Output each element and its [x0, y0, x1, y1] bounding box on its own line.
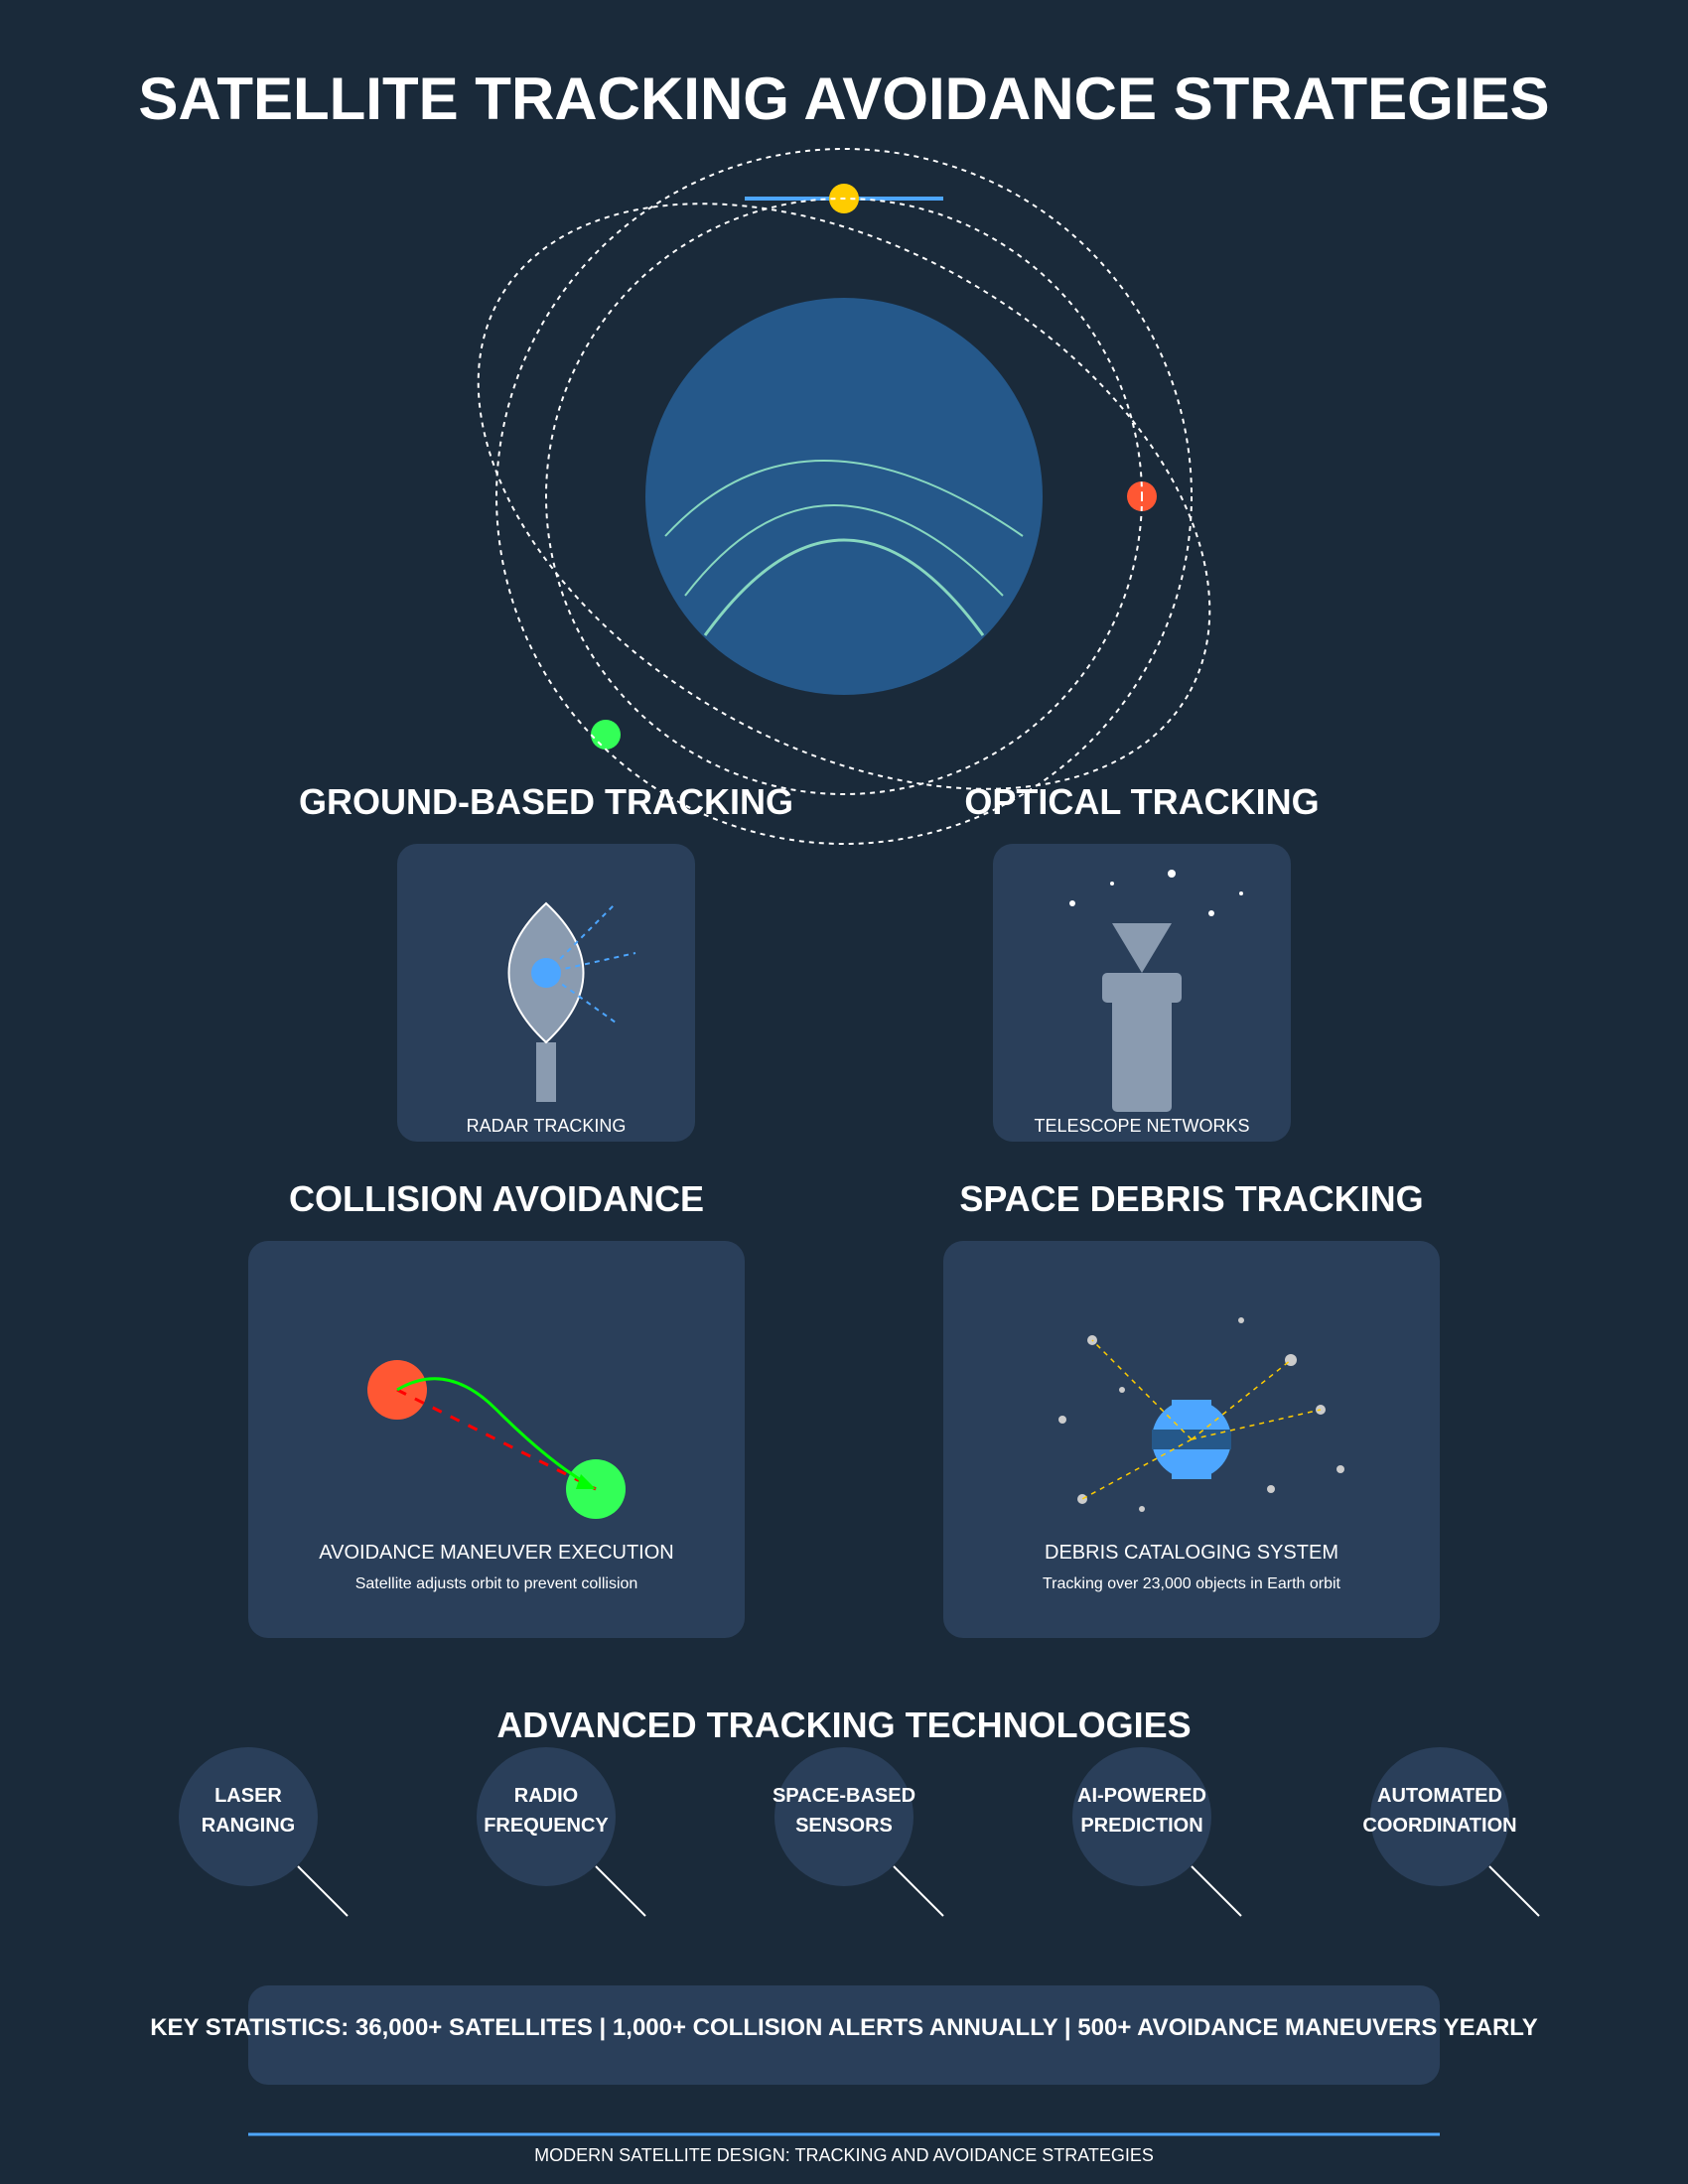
heading: collision avoidance: COLLISION AVOIDANCE	[289, 1178, 704, 1219]
heading: space debris tracking: SPACE DEBRIS TRACKING	[959, 1178, 1424, 1219]
technology: space-based sensors: SPACE-BASED	[773, 1785, 915, 1807]
earth	[645, 298, 1043, 695]
technology: space-based sensors: SENSORS	[795, 1815, 893, 1837]
icon: debris particles	[1058, 1317, 1344, 1512]
satellite: red	[1127, 481, 1157, 511]
icon: green satellite	[566, 1459, 626, 1519]
technology: radio frequency: FREQUENCY	[484, 1815, 609, 1837]
technology: laser ranging: RANGING	[202, 1815, 295, 1837]
icon: red satellite	[367, 1360, 427, 1420]
label: debris cataloging system: DEBRIS CATALOGING SYSTEM	[1045, 1542, 1338, 1564]
title: SATELLITE TRACKING AVOIDANCE STRATEGIES	[138, 66, 1550, 132]
caption: avoidance: Satellite adjusts orbit to prevent collision	[355, 1575, 637, 1592]
heading: optical tracking: OPTICAL TRACKING	[964, 781, 1320, 822]
panel: collision avoidance	[248, 1241, 745, 1638]
panel: telescope networks	[993, 844, 1291, 1142]
icon: tracked satellite	[1152, 1400, 1231, 1479]
icon: radar core	[531, 958, 561, 988]
heading: advanced tracking technologies: ADVANCED TRACKING TECHNOLOGIES	[496, 1705, 1192, 1745]
panel: key statistics	[150, 1985, 1538, 2085]
tracking lines	[1082, 1340, 1321, 1499]
technology: automated coordination: COORDINATION	[1362, 1815, 1517, 1837]
technology: automated coordination	[1362, 1747, 1539, 1916]
technology: radio frequency: RADIO	[514, 1785, 578, 1807]
collision course line	[397, 1390, 596, 1489]
label: radar tracking: RADAR TRACKING	[467, 1116, 626, 1136]
panel: key statistics: KEY STATISTICS: 36,000+ SATELLITES | 1,000+ COLLISION ALERTS ANNUALLY | 500+ AVOIDANCE MANEUVERS YEARLY	[150, 2014, 1538, 2041]
icon: radar dish	[508, 903, 584, 1042]
satellite: yellow with solar panels	[745, 184, 943, 213]
label: avoidance maneuver execution: AVOIDANCE MANEUVER EXECUTION	[319, 1542, 674, 1564]
technology: radio frequency	[477, 1747, 645, 1916]
orbit paths	[376, 82, 1312, 910]
label: telescope networks: TELESCOPE NETWORKS	[1034, 1116, 1250, 1136]
icon: radar beams	[546, 903, 635, 1023]
icon: radar pole	[536, 1042, 556, 1102]
arrow: avoidance path	[397, 1379, 596, 1489]
technology: laser ranging	[179, 1747, 348, 1916]
technology: ai-powered prediction: AI-POWERED	[1077, 1785, 1206, 1807]
panel: radar tracking	[397, 844, 695, 1142]
technology: ai-powered prediction: PREDICTION	[1080, 1815, 1203, 1837]
technology: space-based sensors	[773, 1747, 943, 1916]
orbit diagram	[376, 82, 1312, 910]
footer: MODERN SATELLITE DESIGN: TRACKING AND AVOIDANCE STRATEGIES	[534, 2145, 1154, 2165]
heading: ground-based tracking: GROUND-BASED TRACKING	[299, 781, 793, 822]
technology: ai-powered prediction	[1072, 1747, 1241, 1916]
panel: debris cataloging	[943, 1241, 1440, 1638]
technology: laser ranging: LASER	[214, 1785, 282, 1807]
caption: debris: Tracking over 23,000 objects in Earth orbit	[1043, 1575, 1341, 1592]
icon: stars	[1069, 870, 1243, 916]
icon: telescope	[1102, 923, 1182, 1112]
satellite: green	[591, 720, 621, 750]
technology: automated coordination: AUTOMATED	[1377, 1785, 1502, 1807]
